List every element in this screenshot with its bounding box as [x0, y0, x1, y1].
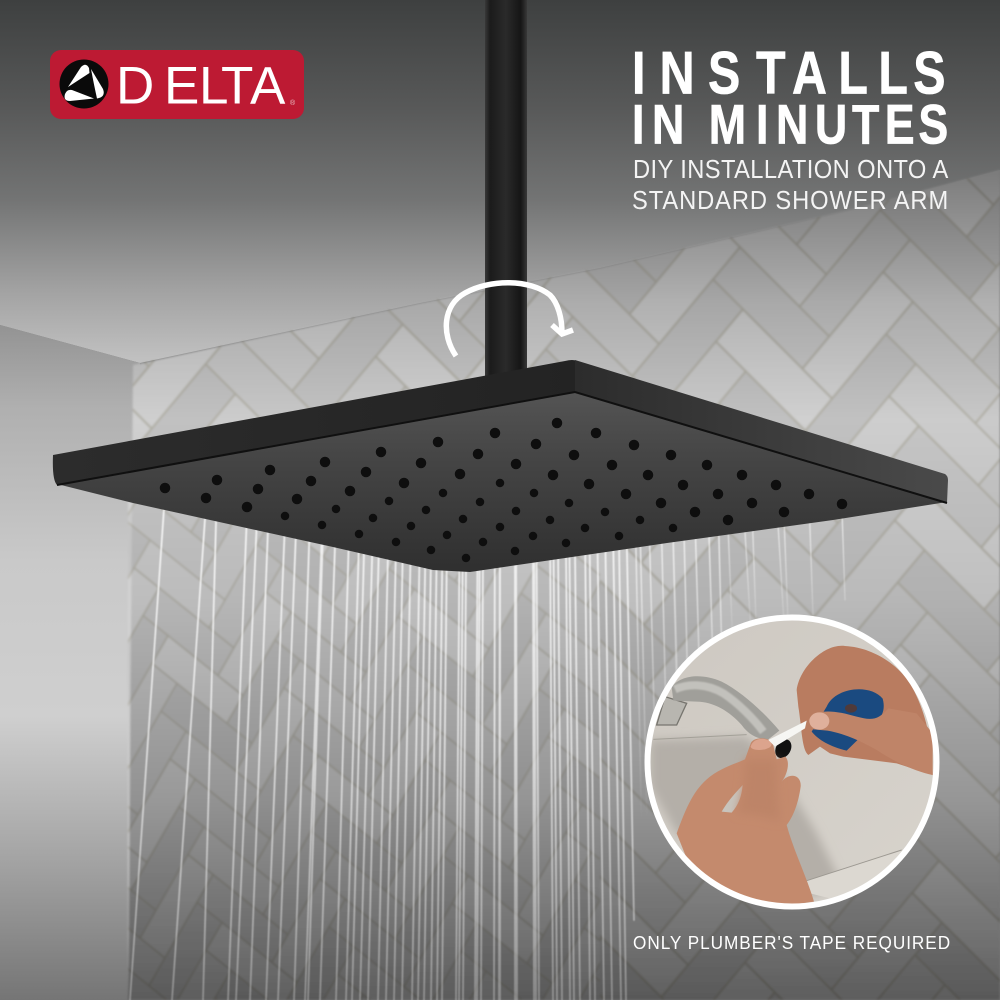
- left hand: [677, 738, 814, 908]
- herringbone tile wall: [128, 170, 1000, 1000]
- shower arm: [485, 0, 527, 376]
- long streams, left and centre: [130, 429, 634, 1000]
- circular inset photo: applying plumber's tape: [640, 610, 950, 920]
- headline: [632, 38, 949, 215]
- headline line 2: IN MINUTES: [632, 93, 948, 156]
- headline line 1: INSTALLS: [632, 38, 946, 107]
- pipe threads: [775, 740, 792, 758]
- blue tape roll: [812, 689, 884, 751]
- tape roll hole: [845, 704, 857, 713]
- logo mark: [60, 60, 108, 108]
- subheading line 1: DIY INSTALLATION ONTO A: [633, 156, 949, 184]
- registered mark: ®: [290, 99, 296, 107]
- right thumb: [808, 708, 933, 775]
- underside plate: [57, 392, 947, 572]
- nozzles, lower rows: [285, 483, 673, 558]
- edge shadow line: [57, 392, 947, 503]
- wall flange: [657, 697, 687, 725]
- photo scene: [650, 620, 934, 904]
- shower arm pipe: [672, 676, 779, 739]
- short streams, far right: [728, 481, 845, 650]
- logo wordmark: DELTA: [116, 56, 286, 116]
- left thumb nail: [751, 739, 772, 750]
- shower head: [53, 360, 948, 572]
- right edge band: [575, 360, 948, 503]
- wall shadows: [650, 735, 910, 900]
- logo badge: [50, 50, 304, 119]
- subheading line 2: STANDARD SHOWER ARM: [632, 187, 948, 215]
- right thumb nail: [809, 712, 829, 730]
- left edge band: [53, 360, 577, 485]
- photo wall: [650, 620, 934, 904]
- caption: ONLY PLUMBER'S TAPE REQUIRED: [633, 932, 950, 953]
- plumber's tape: [768, 721, 807, 747]
- photo white ring: [648, 618, 936, 906]
- pipe highlight: [675, 685, 763, 732]
- right hand back: [797, 646, 933, 775]
- nozzles, upper rows: [165, 423, 842, 520]
- left palm shading: [737, 759, 780, 822]
- ceiling background: [0, 0, 1000, 363]
- rotation arrow: [446, 283, 573, 356]
- mid-length streams, right of centre: [634, 451, 724, 950]
- gap between fingers: [722, 785, 743, 813]
- left side wall: [0, 325, 140, 1000]
- Delta logo: [50, 50, 304, 119]
- water streams: [130, 429, 845, 1000]
